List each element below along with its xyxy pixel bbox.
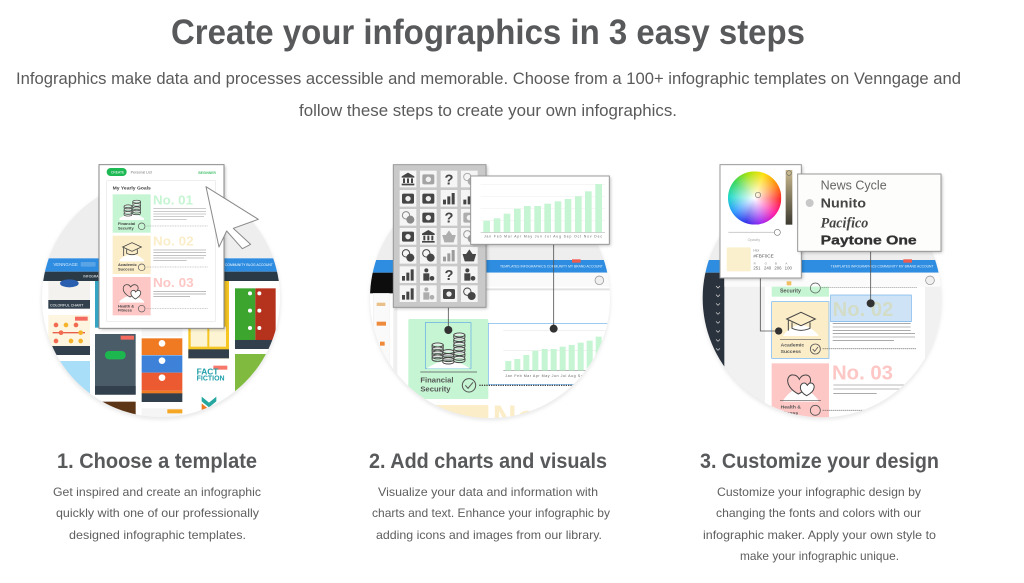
colour picker popup: 206	[774, 266, 782, 271]
selected heading No. 02: No. 02	[833, 298, 893, 321]
step 3 text: changing the fonts and colors with our	[716, 506, 921, 520]
template card popup: BEGINNER	[198, 171, 216, 175]
title: Create your infographics in 3 easy steps	[171, 13, 805, 52]
icon: cursor arrow	[206, 187, 258, 249]
step 2 text: adding icons and images from our library.	[376, 528, 602, 542]
font list popup	[798, 174, 942, 253]
tile: academic success: Success	[781, 349, 801, 355]
colour picker popup	[720, 165, 803, 279]
colour wheel	[728, 171, 781, 225]
font list popup: News Cycle	[821, 178, 887, 192]
intro text: follow these steps to create your own infographics.	[299, 101, 677, 120]
template gallery in circle: COMMUNITY BLOG ACCOUNT	[225, 263, 273, 267]
tile: academic success	[772, 302, 917, 358]
template card popup: Personal List	[131, 170, 152, 174]
step 2 text: charts and text. Enhance your infographic by	[372, 506, 610, 520]
goal tile 3: Fitness	[118, 308, 133, 313]
connector lines	[760, 250, 875, 335]
colour picker popup: Opacity	[748, 238, 760, 242]
goal tile 3	[113, 275, 208, 315]
step 3 heading: 3. Customize your design	[700, 450, 939, 473]
colour picker popup: R	[754, 261, 757, 265]
step 3 text: Customize your infographic design by	[717, 485, 921, 499]
editor in circle: TEMPLATES INFOGRAPHICS COMMUNITY MY BRAND ACCOUNT	[500, 265, 603, 269]
selected icon: coins	[420, 323, 477, 394]
icon library popup	[393, 165, 487, 309]
goal tile 3: No. 03	[153, 275, 194, 290]
step 2 text	[372, 485, 610, 542]
step 1 heading: 1. Choose a template	[57, 450, 257, 473]
panel: step 1 illustration	[40, 164, 282, 420]
colour picker popup: B	[775, 261, 777, 265]
step 1 text: designed infographic templates.	[69, 528, 246, 542]
colour picker popup: 251	[753, 266, 761, 271]
panel: step 2 illustration	[369, 164, 612, 421]
colour picker popup: #FBF0CE	[753, 254, 774, 259]
template card popup: CREATE	[111, 170, 125, 174]
editor in circle	[370, 259, 610, 418]
font list popup: Pacifico	[821, 215, 868, 231]
goal tile 2: Academic	[118, 262, 138, 267]
colour picker popup: 240	[764, 266, 772, 271]
editor in circle: No	[493, 399, 537, 436]
intro text	[16, 69, 961, 120]
chart popup	[471, 176, 611, 246]
colour picker popup: Hex	[753, 249, 760, 253]
step 2 text: Visualize your data and information with	[378, 485, 598, 499]
selected heading No. 02	[831, 295, 915, 340]
goal tile 3: Health &	[118, 303, 134, 308]
goal tile 2: Success	[118, 266, 135, 271]
goal tile 1: Financial	[118, 221, 135, 226]
template card popup: My Yearly Goals	[113, 186, 151, 192]
editor page in circle: Security	[780, 289, 801, 295]
template gallery in circle	[42, 197, 280, 417]
connector lines	[444, 243, 558, 334]
step 1 text	[53, 485, 261, 542]
intro text: Infographics make data and processes accessible and memorable. Choose from a 100+ infographic templates on Venngage and	[16, 69, 961, 88]
editor page in circle: TEMPLATES INFOGRAPHICS COMMUNITY MY BRAND ACCOUNT	[831, 265, 933, 269]
colour picker popup: 100	[785, 266, 792, 271]
step 3 text: infographic maker. Apply your own style to	[703, 528, 936, 542]
selected bar chart: Jan Feb Mar Apr May Jun Jul Aug Sep	[505, 374, 585, 378]
step 3 text	[703, 485, 936, 563]
template card popup	[99, 165, 225, 330]
template gallery in circle: VENNGAGE	[53, 262, 78, 267]
selected icon: coins: Security	[420, 385, 451, 394]
tile: health and fitness	[772, 363, 904, 418]
goal tile 2	[113, 234, 208, 274]
font list popup: Nunito	[821, 195, 866, 210]
template gallery in circle: COLORFUL CHART	[50, 304, 84, 308]
font list popup: Paytone One	[821, 234, 917, 248]
step 2 heading: 2. Add charts and visuals	[369, 450, 607, 473]
selected icon: coins: Financial	[420, 376, 454, 385]
template gallery in circle: FICTION	[197, 376, 225, 383]
colour picker popup: A	[785, 261, 787, 265]
editor page in circle	[702, 259, 940, 417]
template gallery in circle: FACT	[197, 366, 218, 376]
step 1 text: Get inspired and create an infographic	[53, 485, 261, 499]
panel: step 3 illustration	[702, 164, 944, 420]
colour picker popup: G	[765, 261, 768, 265]
selected bar chart	[479, 323, 615, 385]
goal tile 1	[113, 192, 208, 233]
template gallery in circle: INFOGRAPHICS	[83, 275, 109, 279]
tile: academic success: Academic	[781, 343, 804, 349]
tile: health and fitness: Health &	[781, 404, 801, 410]
tile: health and fitness: Fitness	[781, 411, 798, 417]
step 1 text: quickly with one of our professionally	[56, 506, 259, 520]
chart popup: Jan Feb Mar Apr May Jun Jul Aug Sep Oct Nov Dec	[484, 234, 602, 238]
goal tile 1: No. 01	[153, 192, 194, 207]
goal tile 2: No. 02	[153, 234, 194, 249]
tile: health and fitness: No. 03	[832, 362, 893, 385]
goal tile 1: Security	[118, 225, 135, 230]
step 3 text: make your infographic unique.	[740, 549, 899, 563]
